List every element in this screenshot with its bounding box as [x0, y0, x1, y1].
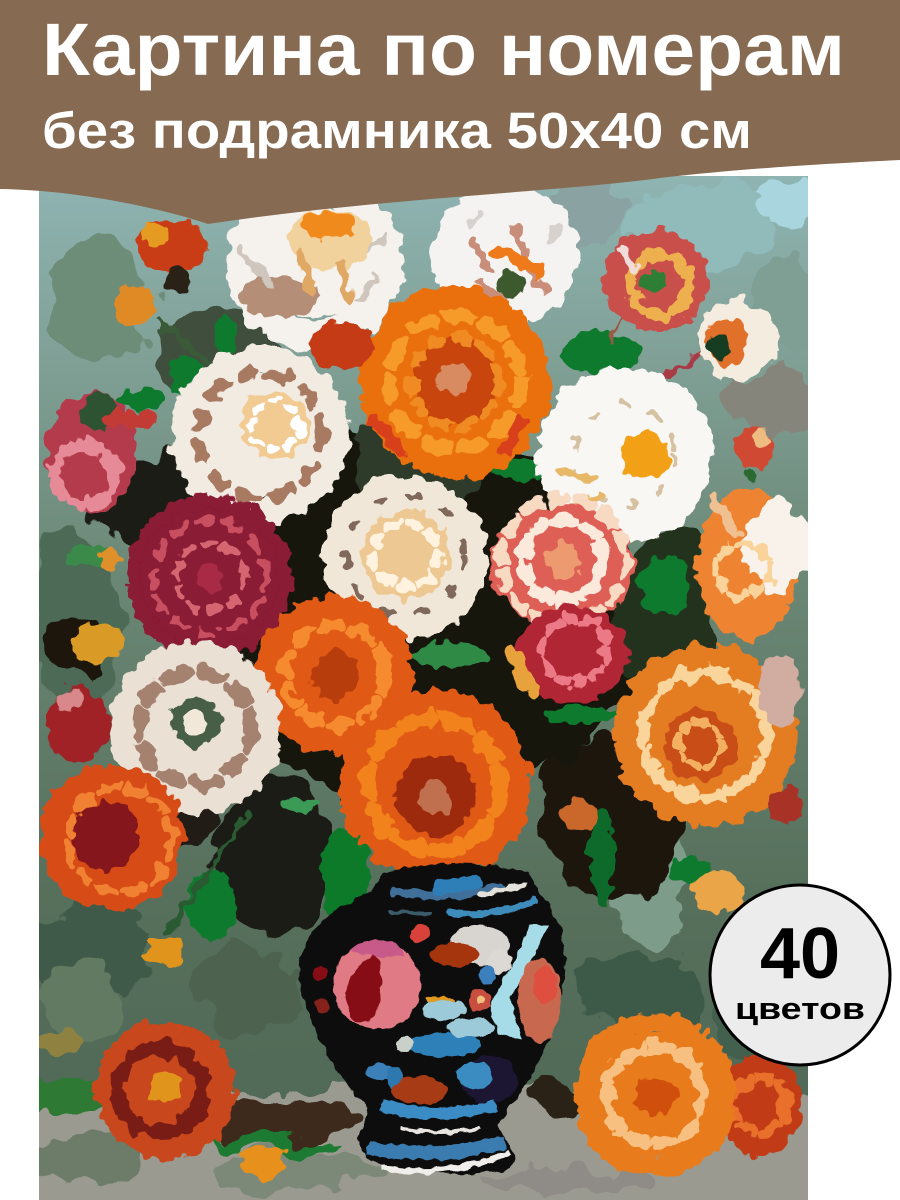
vase ornaments: [366, 925, 562, 1171]
subtitle: без подрамника 50х40 см: [42, 102, 752, 159]
flower: small white-orange right: [706, 298, 770, 382]
flower: cream centre: [335, 488, 475, 628]
flower: white-beige left: [182, 359, 338, 511]
flower: big orange centre top: [310, 296, 543, 468]
bud: yellow left: [71, 548, 123, 662]
title: Картина по номерам: [42, 8, 845, 91]
vase: [299, 864, 565, 1174]
vase neck bands: [390, 882, 535, 914]
flower: big orange-red centre: [347, 697, 523, 873]
flower: orange-red lower left: [46, 774, 178, 902]
flower: crimson-pink lower: [510, 605, 628, 705]
flower: red cluster far left: [48, 685, 108, 765]
flower: white-pink top: [443, 195, 567, 315]
flower: pink-red far left: [46, 392, 150, 512]
flower: lying bottom right, orange: [583, 1023, 802, 1167]
badge label: цветов: [735, 991, 865, 1026]
green leaves and stems: [65, 300, 710, 941]
bud right: [734, 426, 776, 478]
flower: coral pink centre right: [491, 498, 635, 627]
flower: white daisy right: [553, 383, 697, 527]
badge: 40 colours: [710, 885, 890, 1065]
dark foliage mass: [44, 300, 715, 940]
flower: orange-yellow right: [621, 649, 803, 823]
header banner: [0, 0, 900, 224]
flower: orange-white far right: [698, 489, 808, 641]
flower: beige white left: [121, 654, 269, 802]
table top: [20, 1078, 840, 1200]
flower: lying bottom left: [103, 1024, 227, 1156]
vase pink medallion: [313, 924, 429, 1029]
flower: white top: [227, 188, 403, 336]
flower: crimson left: [132, 501, 288, 653]
painting: dahlias in a vase: [20, 170, 840, 1200]
painting background patches: [30, 170, 830, 1067]
flower: orange bud top left: [115, 219, 208, 325]
badge number: 40: [760, 914, 840, 994]
flower: small pink-orange top right: [613, 238, 697, 322]
buds around the vase: [140, 799, 744, 1180]
flower: orange mid: [261, 605, 409, 745]
